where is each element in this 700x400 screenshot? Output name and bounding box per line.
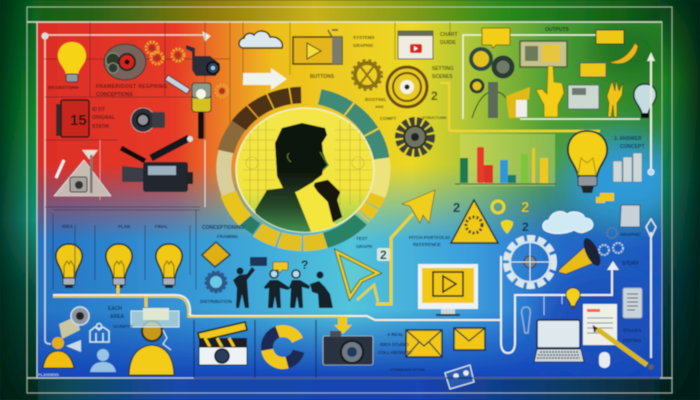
brown segments — [239, 95, 301, 126]
icon: red book with number — [56, 100, 89, 137]
icon: chat panels — [131, 308, 179, 350]
text block: right captions: COMMUNICATION — [390, 367, 425, 372]
text block: blue zone caption: 3. ANSWER — [614, 136, 642, 142]
panel: green zone frame and icons — [440, 27, 656, 175]
panel: blue zone left icons — [38, 210, 500, 377]
segmented outer ring — [224, 95, 382, 243]
text block: yellow zone captions: CHART — [440, 32, 458, 38]
icon: white person — [90, 349, 116, 372]
text: number two lower: 2 — [522, 220, 529, 234]
panel: bottom row icons — [198, 317, 373, 365]
icon: tape cassette — [445, 365, 474, 389]
icon: small bulb — [566, 288, 580, 309]
text block: right captions: STORY — [622, 261, 640, 267]
icon: surveyor tripod and pen — [472, 82, 530, 118]
text block: right captions — [378, 232, 642, 372]
text block: red zone caption: BRAINSTORM — [48, 85, 79, 90]
icon: outlined bulb — [522, 307, 530, 333]
icon: big light bulb — [568, 131, 607, 193]
teal bottom right — [325, 219, 361, 240]
panel: blue zone right icons — [378, 199, 656, 389]
icon: television with play symbol — [293, 30, 342, 64]
panel: cursor arrows — [337, 190, 450, 304]
text: number two in yellow: 2 — [521, 199, 529, 216]
icon: laptop — [534, 320, 584, 362]
text block: right captions: STAGES — [623, 328, 641, 333]
arrow: vertical line with tip — [647, 52, 655, 175]
yellow right — [377, 159, 382, 195]
text block: red zone caption — [48, 84, 167, 130]
chart: grey stacked columns — [613, 153, 642, 182]
text block: red zone caption: ID DT — [92, 107, 105, 113]
icon: x gear badge — [352, 60, 382, 90]
icon: yellow person and megaphone — [43, 337, 81, 368]
text block: right captions: GRAPHIC — [620, 232, 642, 237]
icon: warning triangle — [451, 200, 498, 243]
icon: film reel gears — [104, 42, 163, 80]
panel: yellow zone icons — [239, 30, 458, 153]
disc background — [236, 108, 374, 232]
icon: video camera with lights — [121, 136, 193, 192]
panel: red zone icons — [48, 42, 228, 196]
icon: white light bulb — [634, 84, 656, 118]
text block: red zone caption: STATIK — [92, 124, 110, 130]
text block: bulb captions — [62, 224, 168, 229]
icon: yellow ring — [492, 201, 504, 213]
text block: left captions: AREA — [110, 314, 125, 320]
yellow left — [229, 193, 245, 220]
connector lines — [53, 210, 500, 320]
icon: tablet device — [623, 288, 642, 318]
text block: cursor captions: GRAPH — [356, 244, 372, 249]
text block: right captions: A REAL — [387, 332, 404, 337]
text block: yellow zone captions: SYSTEMS — [353, 35, 375, 40]
text: number two in dark: 2 — [453, 200, 460, 215]
arrow: head on white loop — [607, 261, 619, 270]
arrow: right vertical line — [646, 219, 656, 358]
text: question mark: ? — [301, 258, 308, 272]
text block: yellow zone captions: COMPT — [380, 116, 396, 121]
icon: light card — [568, 85, 599, 109]
icon: cloud — [239, 31, 282, 48]
icon: yellow heart pin — [501, 220, 513, 234]
icon: yellow diamond block — [202, 242, 230, 267]
pale left — [224, 152, 229, 193]
text block: left captions — [38, 225, 244, 377]
icon: small yellow blocks — [596, 193, 614, 203]
icon: projector triangle — [54, 150, 111, 196]
icon: banana shape — [609, 43, 638, 64]
text block: yellow zone captions: GRAPHIC — [353, 43, 375, 48]
text block: red zone caption: ORIGNAL — [92, 115, 115, 121]
panel dividers bottom — [194, 320, 660, 378]
icon: lens camera — [131, 108, 165, 132]
icon: small yellow hand — [607, 80, 623, 117]
icon: yellow outlined cursor — [337, 252, 378, 302]
icon: large yellow hand — [536, 66, 564, 117]
icon: document with red heading — [583, 304, 617, 345]
icon: target ring — [387, 67, 427, 107]
icon: yellow envelope — [406, 330, 442, 357]
icon: row of three bulbs — [56, 244, 182, 288]
teal small — [245, 220, 256, 229]
icon: browser video player — [398, 31, 433, 59]
text block: left captions: EACH — [108, 306, 123, 312]
panel: film crew silhouettes — [233, 257, 333, 308]
text block: right captions: EDITING — [623, 338, 642, 343]
arrow: yellow stepped arrow — [376, 190, 435, 304]
chart: bar chart — [455, 134, 556, 186]
text block: blue zone caption — [614, 136, 644, 150]
teal segments — [320, 97, 381, 159]
icon: C shaped ring — [267, 331, 298, 363]
text block: yellow zone captions: SCENES — [432, 74, 453, 80]
icon: second yellow envelope — [454, 328, 485, 350]
icon: computer mouse — [599, 352, 610, 368]
text block: left captions: DISTRIBUTION — [200, 299, 232, 304]
text block: yellow zone captions: STRUCTURE — [422, 115, 447, 120]
icon: small grey gears — [599, 228, 623, 255]
icon: lens badge — [59, 307, 89, 339]
text block: green zone caption: OUTPUTS — [545, 27, 570, 33]
yellow bottom — [256, 229, 325, 243]
icon: cluster of gears — [471, 49, 512, 92]
figure: group of collaborators — [264, 270, 333, 308]
text block: cursor captions: TEXT — [356, 236, 368, 241]
icon: camera with down arrow — [323, 317, 373, 365]
icon: studio spotlight on stand — [165, 75, 228, 139]
panel: central portrait ring — [224, 95, 382, 243]
text block: yellow zone captions: 2 — [431, 89, 438, 103]
icon: yellow card — [580, 63, 606, 77]
icon: yellow megaphone — [558, 236, 604, 274]
text block: red zone caption: FRAMERIDOGT REGPRING — [96, 84, 167, 90]
text block: cursor captions: PITCH PORTFOLIO — [409, 235, 450, 240]
text block: yellow zone captions — [310, 32, 458, 121]
text block: cursor captions — [356, 235, 450, 249]
text block: left captions: PLANNING — [38, 372, 59, 377]
yellow connector line — [440, 83, 600, 131]
arrow: white arrow right — [243, 68, 287, 90]
arrows: white loop with up arrow — [501, 256, 612, 353]
text block: yellow zone captions: BOOTING — [365, 97, 386, 102]
icon: speech bubble — [482, 28, 510, 48]
text block: yellow zone captions: SETTING — [432, 66, 454, 72]
icon: video monitor — [418, 264, 478, 316]
icon: yellow pencil — [594, 327, 654, 370]
icon: yellow person with headset — [129, 321, 174, 375]
book number: 15 — [70, 112, 87, 129]
icon: presentation screen — [520, 41, 567, 67]
text block: red zone caption: CONCEPTIONS — [96, 92, 133, 98]
icon: yellow light bulb — [58, 42, 86, 82]
icon: clapperboard — [198, 322, 247, 365]
icon: white people group — [90, 324, 109, 342]
icon: white cloud — [543, 212, 593, 234]
icon: blue gear — [206, 272, 226, 292]
text block: right captions: COLLABORATE — [378, 350, 412, 355]
text block: left captions: FRAMING — [217, 234, 238, 239]
text block: right captions: IDEA STUDIO — [380, 342, 409, 347]
text block: blue zone caption: CONCEPT — [620, 144, 644, 150]
figure: camera operator — [233, 257, 267, 308]
icon: document page — [620, 205, 640, 227]
icon: dark gear — [399, 121, 431, 153]
grid texture — [243, 120, 372, 205]
text block: left captions: CONCEPTIONING — [202, 225, 244, 231]
icon: small camera with gear — [172, 45, 220, 76]
icon: white cog wheel — [506, 238, 554, 286]
text block: yellow zone captions: AND — [375, 104, 384, 109]
text block: bulb captions: IDEA — [62, 224, 74, 229]
text block: bulb captions: FINAL — [155, 224, 168, 229]
icon: yellow speech bubble — [273, 262, 288, 273]
figure: thinking man silhouette — [255, 123, 342, 238]
icon: yellow note — [596, 30, 624, 44]
text block: yellow zone captions: GUIDE — [440, 40, 456, 46]
label: boxed number two: 2 — [380, 248, 387, 262]
text block: yellow zone captions: BUTTONS — [310, 74, 335, 80]
text block: left captions: SCRIPTS — [113, 324, 133, 329]
text block: cursor captions: REFERENCE — [413, 242, 441, 247]
text block: bulb captions: PLAN — [118, 224, 130, 229]
